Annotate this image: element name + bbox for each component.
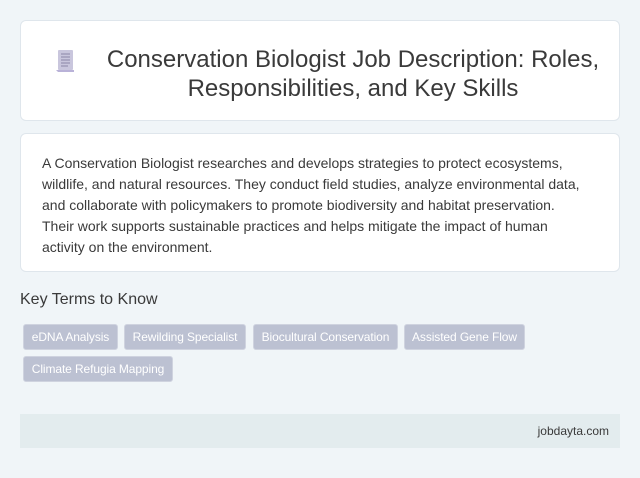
description text: A Conservation Biologist researches and develops strategies to protect ecosystems, [42,155,563,171]
title: Conservation Biologist Job Description: Roles, Responsibilities, and Key Skills [107,46,599,102]
tags: Assisted Gene Flow [412,330,517,344]
footer [20,414,620,448]
tags: Biocultural Conservation [262,330,389,344]
description text: activity on the environment. [42,239,212,255]
tags: Rewilding Specialist [133,330,237,344]
description text [42,155,580,255]
description text: wildlife, and natural resources. They conduct field studies, analyze environmental data, [42,176,580,192]
icon: document [56,50,74,72]
title card [20,20,620,121]
description text: Their work supports sustainable practices and helps mitigate the impact of human [42,218,548,234]
footer: jobdayta.com [538,424,609,438]
heading: key terms: Key Terms to Know [20,291,158,308]
tags: Climate Refugia Mapping [32,362,164,376]
tags: eDNA Analysis [32,330,109,344]
description text: and collaborate with policymakers to promote biodiversity and habitat preservation. [42,197,555,213]
description card [20,133,620,272]
